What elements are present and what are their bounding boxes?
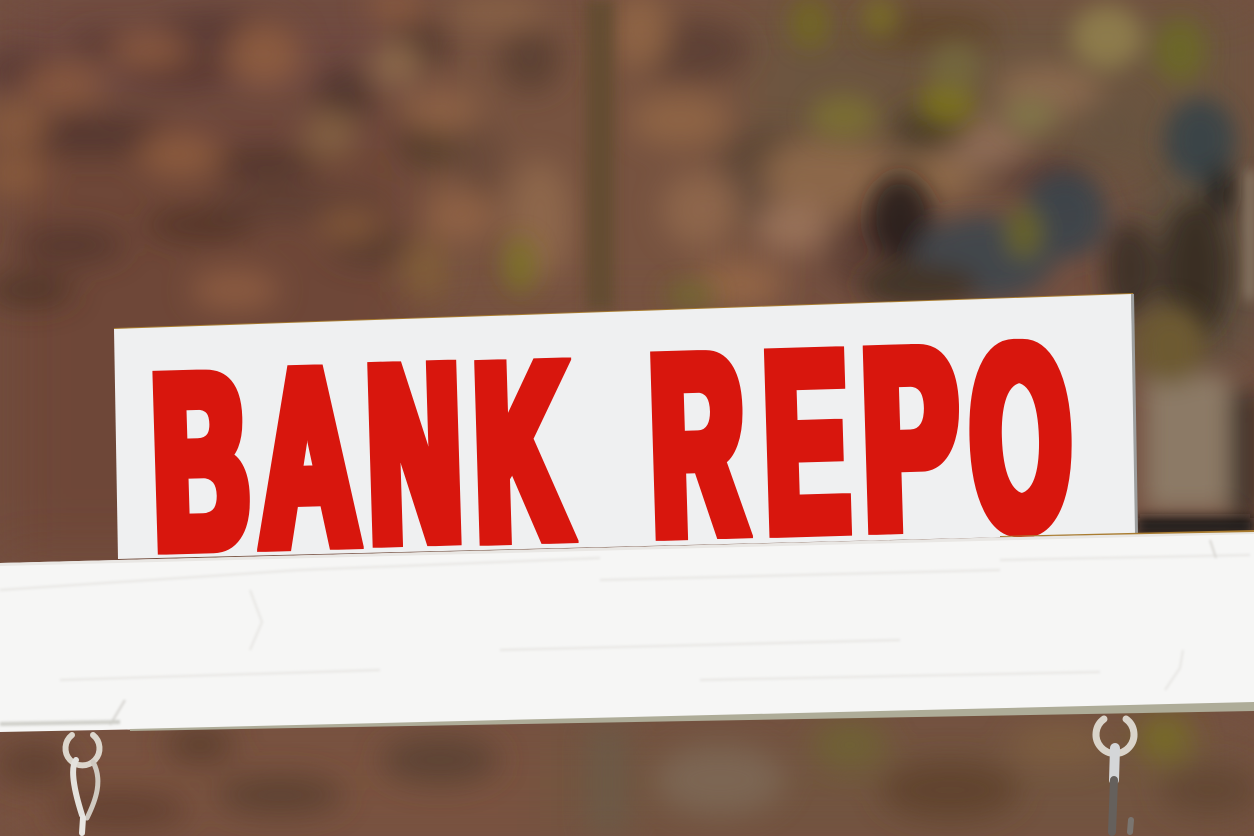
sign text: BANK REPO: [149, 292, 1074, 601]
white wooden post: [0, 530, 1254, 732]
sign text: BANK REPO: N: [364, 313, 465, 595]
right hanging chain: [1096, 719, 1134, 832]
sign text: BANK REPO: P: [859, 294, 962, 582]
sign text: BANK REPO: R: [647, 301, 748, 588]
sign text: BANK REPO: A: [255, 318, 360, 599]
sign board: [114, 292, 1138, 601]
sign text: BANK REPO: E: [761, 299, 851, 586]
sign text: BANK REPO: K: [471, 311, 571, 592]
sign text: BANK REPO: O: [967, 292, 1074, 585]
left hanging chain: [66, 735, 100, 833]
sign text: BANK REPO: B: [149, 321, 252, 601]
